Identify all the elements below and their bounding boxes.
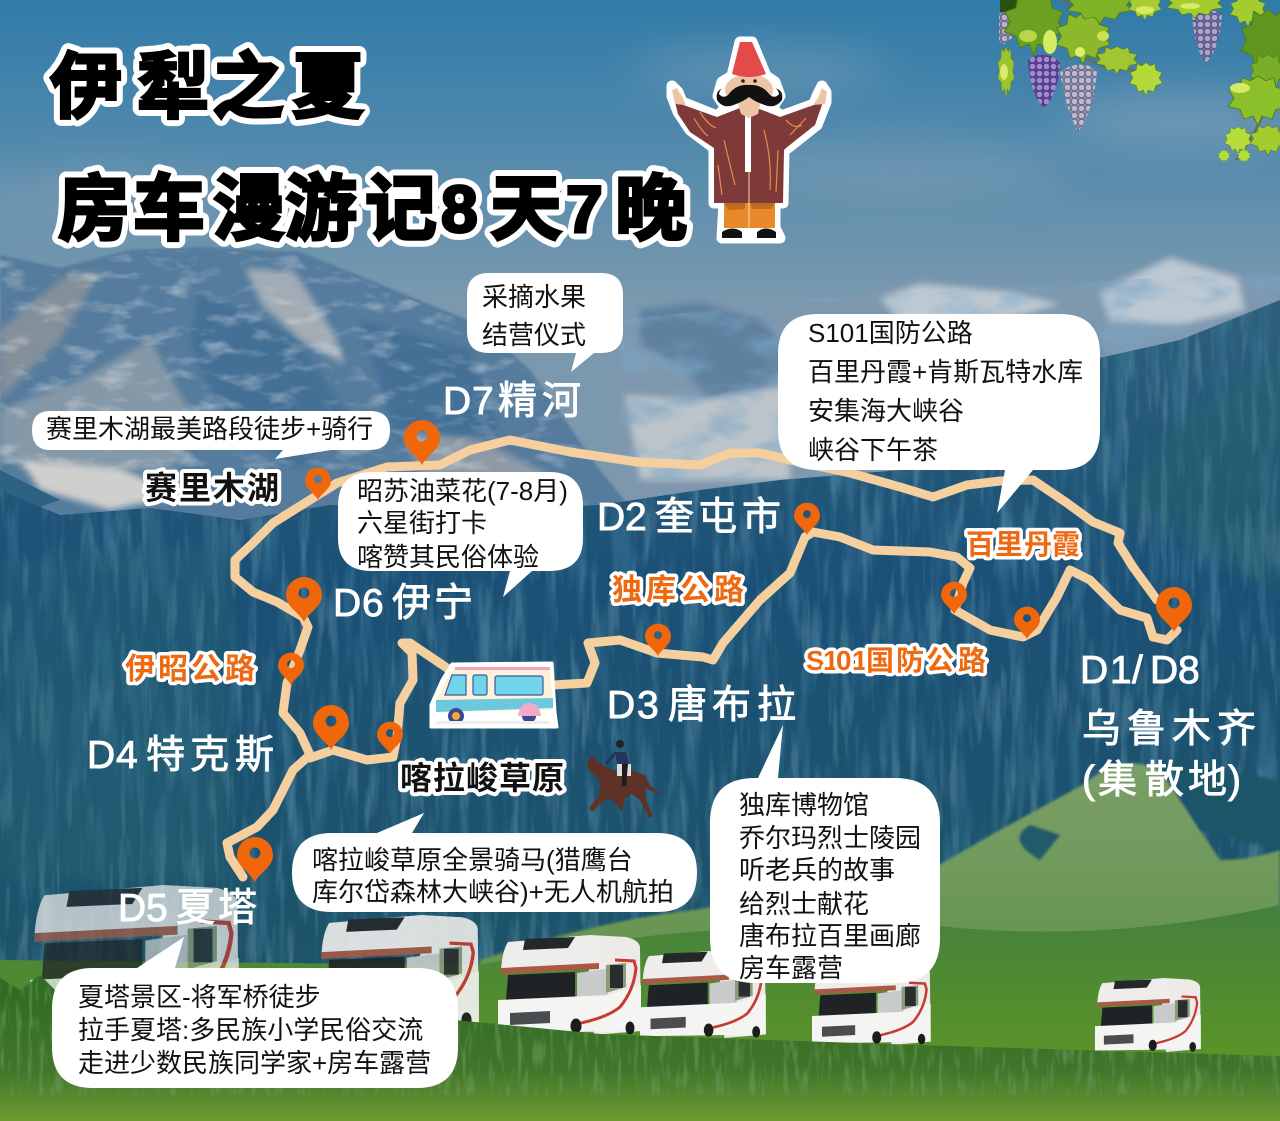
label: D1/D8 乌鲁木齐 集散地: (集散地) <box>1082 759 1241 802</box>
callout: 赛里木湖: 赛里木湖最美路段徒步+骑行 <box>46 414 373 444</box>
title: 伊犁之夏 房车漫游记8天7晚: 8 <box>441 172 478 246</box>
title: 伊犁之夏 房车漫游记8天7晚: 房车漫游记 <box>58 170 437 250</box>
title: 伊犁之夏 房车漫游记8天7晚: 晚 <box>615 170 687 250</box>
callout: 昭苏油菜花: 六星街打卡 <box>357 508 487 538</box>
title: 伊犁之夏 房车漫游记8天7晚: 伊犁之夏 <box>50 48 364 128</box>
title: 伊犁之夏 房车漫游记8天7晚: 房车漫游记 <box>58 170 437 250</box>
label: D3唐布拉: D3唐布拉 <box>607 684 796 727</box>
callout: 喀拉峻草原 <box>292 813 697 912</box>
callout: 夏塔景区 <box>52 937 458 1088</box>
callout: 独库博物馆: 独库博物馆 <box>739 790 869 820</box>
title: 伊犁之夏 房车漫游记8天7晚: 晚 <box>615 170 687 250</box>
callout: 独库博物馆: 给烈士献花 <box>739 889 869 919</box>
callout: S101 国防公路: 峡谷下午茶 <box>808 435 938 465</box>
label: D1/D8 乌鲁木齐 集散地: D1/D8 <box>1080 649 1200 692</box>
route line: peach road loop <box>227 440 1177 877</box>
callout: 采摘水果: 结营仪式 <box>482 320 586 350</box>
label: D5夏塔: D5夏塔 <box>118 887 257 930</box>
title: 伊犁之夏 房车漫游记8天7晚: 8 <box>441 172 478 246</box>
callout: S101 国防公路: S101国防公路 <box>808 318 973 348</box>
callout: 独库博物馆: 乔尔玛烈士陵园 <box>739 823 921 853</box>
callout: 赛里木湖 <box>32 411 390 459</box>
label: 独库公路: 独库公路 <box>612 574 744 607</box>
icon: horse rider <box>587 740 663 818</box>
callout: 昭苏油菜花: 昭苏油菜花(7-8月) <box>357 476 568 506</box>
callout: 夏塔景区: 拉手夏塔:多民族小学民俗交流 <box>78 1015 423 1045</box>
callout: S101 国防公路: 百里丹霞+肯斯瓦特水库 <box>808 357 1083 387</box>
label: D4特克斯: D4特克斯 <box>87 734 274 777</box>
callout: 采摘水果 <box>467 273 623 372</box>
label: D7精河: D7精河 <box>443 380 581 423</box>
callout: S101 国防公路: 安集海大峡谷 <box>808 396 964 426</box>
title: 伊犁之夏 房车漫游记8天7晚: 天 <box>490 170 562 250</box>
callout: S101 国防公路 <box>778 314 1100 513</box>
title: 伊犁之夏 房车漫游记8天7晚: 伊犁之夏 <box>50 48 364 128</box>
callout: 独库博物馆: 房车露营 <box>739 953 843 983</box>
label: 伊昭公路: 伊昭公路 <box>125 653 255 686</box>
callout: 夏塔景区: 走进少数民族同学家+房车露营 <box>78 1048 431 1078</box>
callout: 独库博物馆 <box>710 725 940 983</box>
label: D1/D8 乌鲁木齐 集散地 <box>1080 649 1256 802</box>
callout: 昭苏油菜花 <box>338 472 583 597</box>
callout: 昭苏油菜花: 喀赞其民俗体验 <box>357 542 539 572</box>
icon: cartoon camper van <box>431 663 557 727</box>
title: 伊犁之夏 房车漫游记8天7晚: 天 <box>490 170 562 250</box>
label: S101国防公路: S101国防公路 <box>806 645 986 676</box>
icon: mascot in red hat with moustache <box>672 42 827 238</box>
row of white RV motorhomes <box>30 885 1201 1052</box>
label: D1/D8 乌鲁木齐 集散地: 乌鲁木齐 <box>1082 708 1256 751</box>
callout: 独库博物馆: 听老兵的故事 <box>739 855 895 885</box>
label: 喀拉峻草原: 喀拉峻草原 <box>400 760 564 796</box>
title: 伊犁之夏 房车漫游记8天7晚 <box>50 48 687 250</box>
title: 伊犁之夏 房车漫游记8天7晚: 7 <box>566 172 603 246</box>
label: D6伊宁: D6伊宁 <box>333 582 473 625</box>
map pins <box>237 420 1192 882</box>
callout: 采摘水果: 采摘水果 <box>482 282 586 312</box>
label: 百里丹霞: 百里丹霞 <box>966 529 1080 560</box>
foreground grass <box>0 975 1280 1121</box>
callout: 喀拉峻草原: 库尔岱森林大峡谷)+无人机航拍 <box>312 877 674 907</box>
title: 伊犁之夏 房车漫游记8天7晚: 7 <box>566 172 603 246</box>
icon: grape vine with leaves and grape clusters <box>998 0 1280 163</box>
label: D2奎屯市: D2奎屯市 <box>597 496 781 539</box>
label: 赛里木湖: 赛里木湖 <box>145 470 279 506</box>
callout: 独库博物馆: 唐布拉百里画廊 <box>739 921 921 951</box>
callout: 夏塔景区: 夏塔景区-将军桥徒步 <box>78 982 321 1012</box>
callout: 喀拉峻草原: 喀拉峻草原全景骑马(猎鹰台 <box>312 845 633 875</box>
